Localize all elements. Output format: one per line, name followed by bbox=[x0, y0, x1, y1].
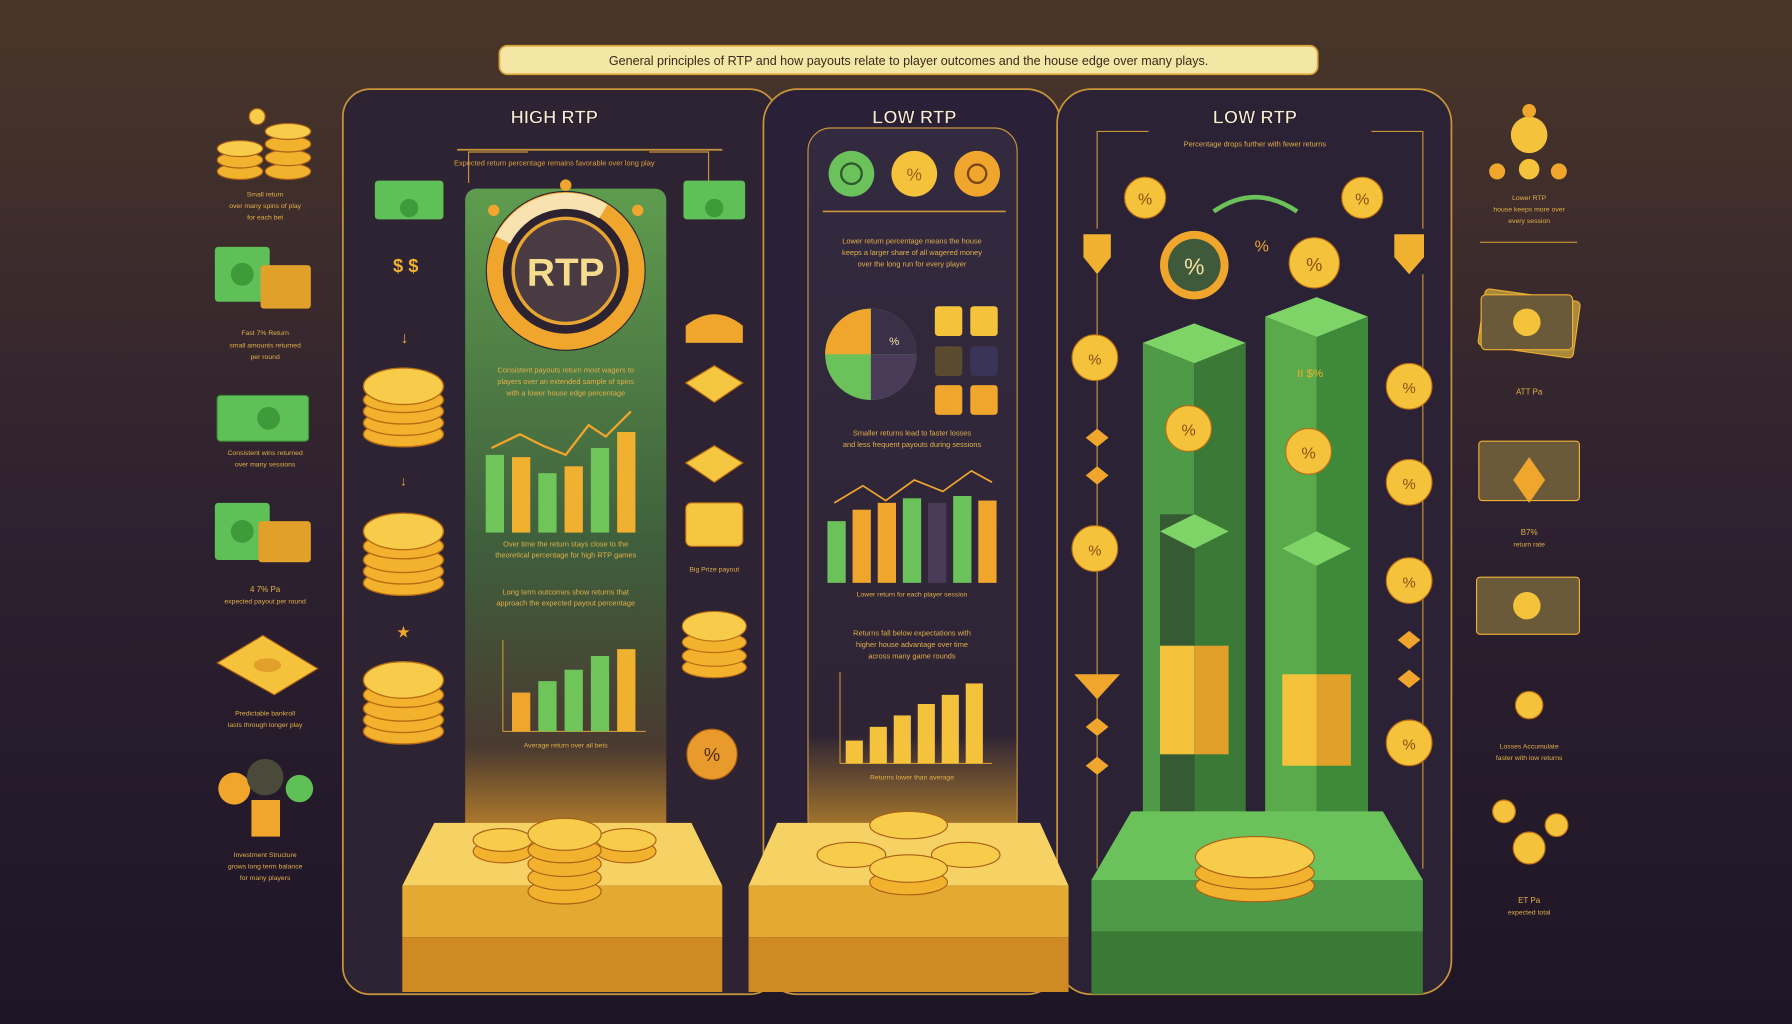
text block: higher house advantage over time bbox=[856, 640, 968, 649]
side coins: % bbox=[1088, 543, 1101, 559]
right icon column: Big Prize payout bbox=[689, 566, 739, 573]
bar chart bbox=[827, 471, 997, 599]
text block: with a lower house edge percentage bbox=[505, 388, 625, 397]
left sidebar: Predictable bankroll bbox=[235, 710, 296, 717]
RTP gauge bbox=[486, 179, 646, 351]
tall columns: % bbox=[1301, 445, 1316, 462]
left sidebar: Fast 7% Return bbox=[241, 330, 289, 337]
panel: high RTP: Expected return percentage remains favorable over long play bbox=[454, 159, 655, 168]
side coins: % bbox=[1088, 353, 1101, 369]
left sidebar: expected payout per round bbox=[224, 598, 306, 605]
side coins: % bbox=[1403, 575, 1416, 591]
green column bbox=[465, 189, 666, 846]
text block: players over an extended sample of spins bbox=[497, 377, 634, 386]
top coins: % bbox=[1138, 192, 1152, 209]
icon: plant bbox=[218, 759, 313, 837]
base: yellow low RTP bbox=[749, 811, 1069, 992]
base: green low RTP bbox=[1091, 811, 1423, 994]
side coins: % bbox=[1403, 477, 1416, 493]
left cash icon bbox=[375, 181, 443, 219]
text block bbox=[842, 236, 982, 268]
heading: low rtp: LOW RTP bbox=[872, 106, 956, 127]
icon: cash 3 bbox=[215, 503, 311, 562]
left coin stacks: ↓ bbox=[401, 330, 409, 347]
right sidebar: Losses Accumulate bbox=[1500, 744, 1559, 751]
title banner bbox=[499, 46, 1318, 74]
icon: cash 2 bbox=[217, 395, 309, 441]
left coin stacks: ★ bbox=[396, 625, 411, 642]
text block: Over time the return stays close to the bbox=[503, 539, 628, 548]
panel: low RTP right: Percentage drops further with fewer returns bbox=[1184, 139, 1326, 148]
top coins: % bbox=[1355, 192, 1369, 209]
bar chart 2: Returns lower than average bbox=[870, 774, 954, 781]
right icon column: % bbox=[704, 744, 720, 765]
left sidebar: per round bbox=[250, 354, 280, 361]
text block: over the long run for every player bbox=[858, 259, 967, 268]
left sidebar: grows long term balance bbox=[228, 864, 303, 871]
left sidebar: for many players bbox=[240, 875, 291, 882]
RTP gauge: RTP bbox=[527, 252, 605, 295]
text block: Long term outcomes show returns that bbox=[503, 587, 629, 596]
top coins: % bbox=[1255, 238, 1269, 255]
icon: cash bbox=[215, 247, 311, 309]
text block bbox=[843, 428, 981, 449]
left sidebar: Consistent wins returned bbox=[227, 450, 303, 457]
icon: money bag bbox=[1489, 104, 1567, 179]
icon: coin bbox=[1515, 691, 1543, 719]
right sidebar: Lower RTP bbox=[1512, 195, 1547, 202]
top coins: % bbox=[1306, 254, 1322, 275]
icon: banknotes bbox=[1478, 288, 1581, 358]
text block: Returns fall below expectations with bbox=[853, 628, 971, 637]
right sidebar: B7% bbox=[1521, 528, 1538, 537]
panel: low RTP middle bbox=[763, 89, 1061, 994]
text block: Consistent payouts return most wagers to bbox=[497, 366, 634, 375]
text block: across many game rounds bbox=[868, 651, 956, 660]
dark column bbox=[808, 128, 1017, 842]
right sidebar: return rate bbox=[1513, 541, 1545, 548]
right sidebar bbox=[1477, 104, 1581, 916]
heading: LOW RTP bbox=[1213, 106, 1297, 127]
icon: bill bbox=[1477, 577, 1579, 634]
bar chart 2 bbox=[840, 672, 992, 781]
text block: and less frequent payouts during sessions bbox=[843, 440, 981, 449]
top coins bbox=[1125, 177, 1383, 299]
left sidebar: small amounts returned bbox=[229, 342, 301, 349]
bar chart 2 bbox=[503, 640, 646, 749]
right sidebar: expected total bbox=[1508, 909, 1551, 916]
left sidebar: lasts through longer play bbox=[228, 722, 303, 729]
text block: Smaller returns lead to faster losses bbox=[853, 428, 971, 437]
right sidebar: house keeps more over bbox=[1493, 206, 1566, 213]
right sidebar: ATT Pa bbox=[1516, 387, 1543, 396]
text block: approach the expected payout percentage bbox=[496, 599, 635, 608]
text block: Lower return percentage means the house bbox=[842, 236, 982, 245]
tall columns bbox=[1143, 297, 1368, 869]
text block bbox=[495, 539, 636, 608]
right sidebar: every session bbox=[1508, 218, 1550, 225]
tall columns: II $% bbox=[1297, 368, 1323, 380]
heading: high rtp: HIGH RTP bbox=[511, 106, 598, 127]
right cash icon bbox=[683, 181, 745, 219]
icon: cash stack bbox=[217, 635, 318, 695]
icon grid bbox=[935, 306, 998, 415]
text block bbox=[853, 628, 971, 660]
icons: money bags: % bbox=[907, 165, 922, 185]
icon: box bbox=[1479, 441, 1579, 503]
panel: high RTP bbox=[343, 89, 777, 994]
line and bar chart bbox=[486, 411, 635, 533]
tall columns: % bbox=[1181, 422, 1196, 439]
side coins bbox=[1072, 335, 1432, 775]
right sidebar: faster with low returns bbox=[1496, 755, 1563, 762]
left sidebar: for each bet bbox=[247, 214, 283, 221]
pie chart bbox=[825, 309, 917, 400]
base: yellow high RTP bbox=[402, 818, 722, 992]
side coins: % bbox=[1403, 381, 1416, 397]
right sidebar: ET Pa bbox=[1518, 896, 1541, 905]
text block: theoretical percentage for high RTP games bbox=[495, 551, 636, 560]
text block: keeps a larger share of all wagered money bbox=[842, 248, 982, 257]
left sidebar: 4 7% Pa bbox=[250, 585, 281, 594]
left sidebar bbox=[215, 109, 318, 882]
left coin stacks bbox=[363, 255, 443, 744]
right icon column bbox=[682, 314, 746, 779]
left sidebar: Small return bbox=[247, 192, 284, 199]
left sidebar: over many spins of play bbox=[229, 203, 302, 210]
panel: low RTP right bbox=[1057, 89, 1451, 994]
top coins: % bbox=[1184, 253, 1204, 279]
bar chart: Lower return for each player session bbox=[857, 592, 968, 599]
text block bbox=[497, 366, 634, 397]
connector lines bbox=[1097, 131, 1423, 869]
bar chart 2: Average return over all bets bbox=[524, 742, 608, 749]
left sidebar: over many sessions bbox=[235, 461, 296, 468]
icons: money bags bbox=[829, 151, 1000, 197]
side coins: % bbox=[1403, 738, 1416, 754]
left coin stacks: $ $ bbox=[393, 255, 418, 276]
icon: coins bbox=[1493, 800, 1568, 864]
icon: coin stacks bbox=[217, 109, 311, 179]
left coin stacks: ↓ bbox=[400, 474, 407, 489]
pie chart: % bbox=[889, 336, 899, 348]
left sidebar: Investment Structure bbox=[234, 852, 297, 859]
title banner: General principles of RTP and how payouts relate to player outcomes and the house edge over many plays. bbox=[609, 54, 1208, 68]
